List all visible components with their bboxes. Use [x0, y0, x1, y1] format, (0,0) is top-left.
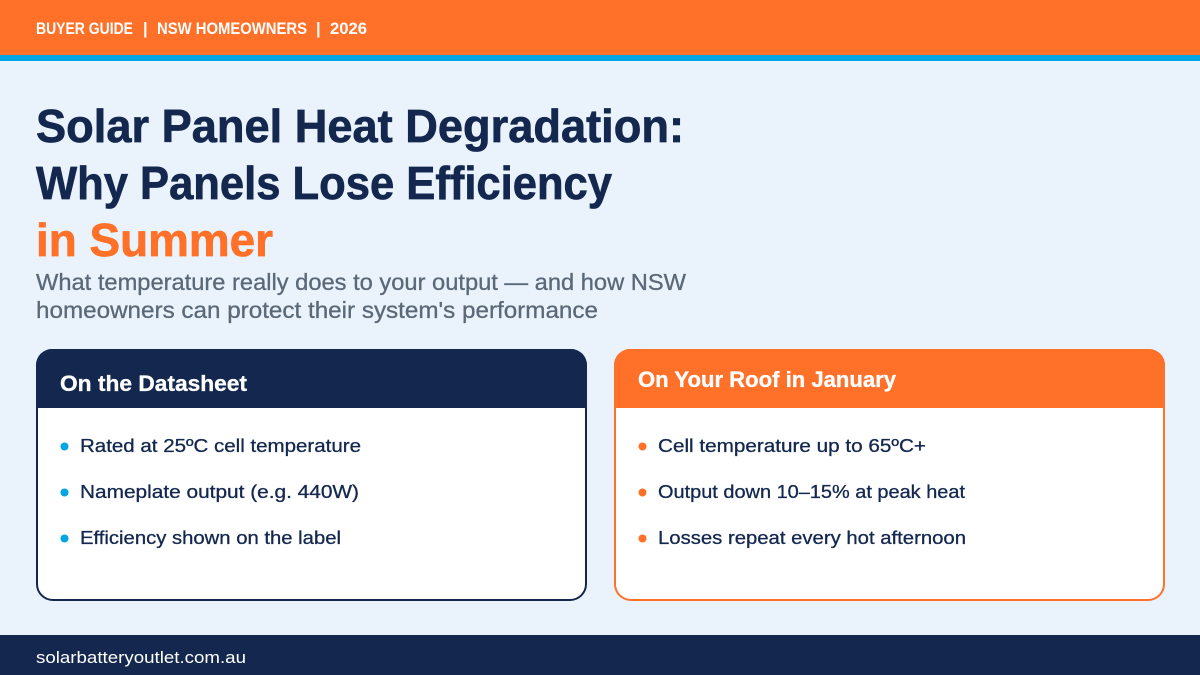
footer — [0, 635, 1200, 675]
banner text — [36, 20, 367, 38]
subtitle: homeowners can protect their system's performance — [36, 297, 598, 323]
footer website: solarbatteryoutlet.com.au — [36, 648, 246, 667]
banner text: 2026 — [330, 20, 367, 38]
roof bullet list: Cell temperature up to 65ºC+ — [658, 435, 926, 456]
roof bullet list — [638, 435, 966, 548]
panel header: on the datasheet: On the Datasheet — [60, 371, 248, 396]
datasheet bullet list: Efficiency shown on the label — [80, 527, 341, 548]
banner text: NSW HOMEOWNERS — [157, 20, 307, 38]
top banner — [0, 0, 1200, 61]
banner text: | — [143, 20, 148, 38]
datasheet bullet list: Rated at 25ºC cell temperature — [80, 435, 361, 456]
banner text: | — [316, 20, 321, 38]
datasheet bullet list — [60, 435, 361, 548]
title: in Summer — [36, 214, 273, 266]
panel header: on your roof: On Your Roof in January — [638, 367, 897, 392]
roof bullet list: Losses repeat every hot afternoon — [658, 527, 966, 548]
datasheet bullet list: Nameplate output (e.g. 440W) — [80, 481, 359, 502]
subtitle: What temperature really does to your output — and how NSW — [36, 269, 686, 295]
roof bullet list: Output down 10–15% at peak heat — [658, 481, 965, 502]
panel header: on the datasheet — [36, 349, 587, 408]
title: Solar Panel Heat Degradation: — [36, 100, 684, 152]
panel: on your roof in january — [614, 349, 1165, 600]
banner text: BUYER GUIDE — [36, 20, 133, 38]
subtitle — [36, 269, 686, 323]
panel header: on your roof — [614, 349, 1165, 408]
title: Why Panels Lose Efficiency — [36, 157, 612, 209]
panel: on the datasheet — [36, 349, 587, 600]
title — [36, 100, 684, 266]
